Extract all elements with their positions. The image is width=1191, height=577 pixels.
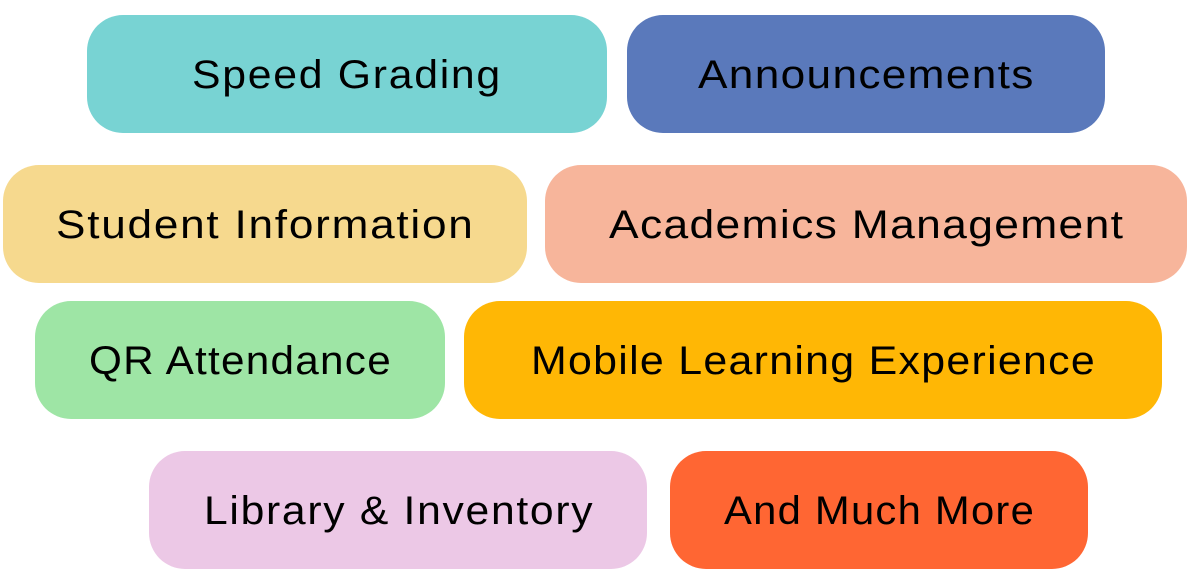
pill: Library & Inventory: [149, 451, 647, 569]
pill: And Much More: And Much More: [724, 489, 1035, 533]
pill: Academics Management: Academics Management: [609, 203, 1124, 247]
pill: Mobile Learning Experience: [464, 301, 1162, 419]
pill: QR Attendance: [35, 301, 445, 419]
pill: Announcements: Announcements: [698, 53, 1035, 97]
pill: Academics Management: [545, 165, 1187, 283]
pill: Announcements: [627, 15, 1105, 133]
pill: And Much More: [670, 451, 1088, 569]
pill: Speed Grading: [87, 15, 607, 133]
pill: QR Attendance: QR Attendance: [89, 339, 392, 383]
pill: Speed Grading: Speed Grading: [192, 53, 502, 97]
pill: Student Information: [3, 165, 527, 283]
pill: Student Information: Student Information: [56, 203, 475, 247]
pill: Library & Inventory: Library & Inventory: [204, 489, 594, 533]
pill: Mobile Learning Experience: Mobile Learning Experience: [531, 339, 1096, 383]
